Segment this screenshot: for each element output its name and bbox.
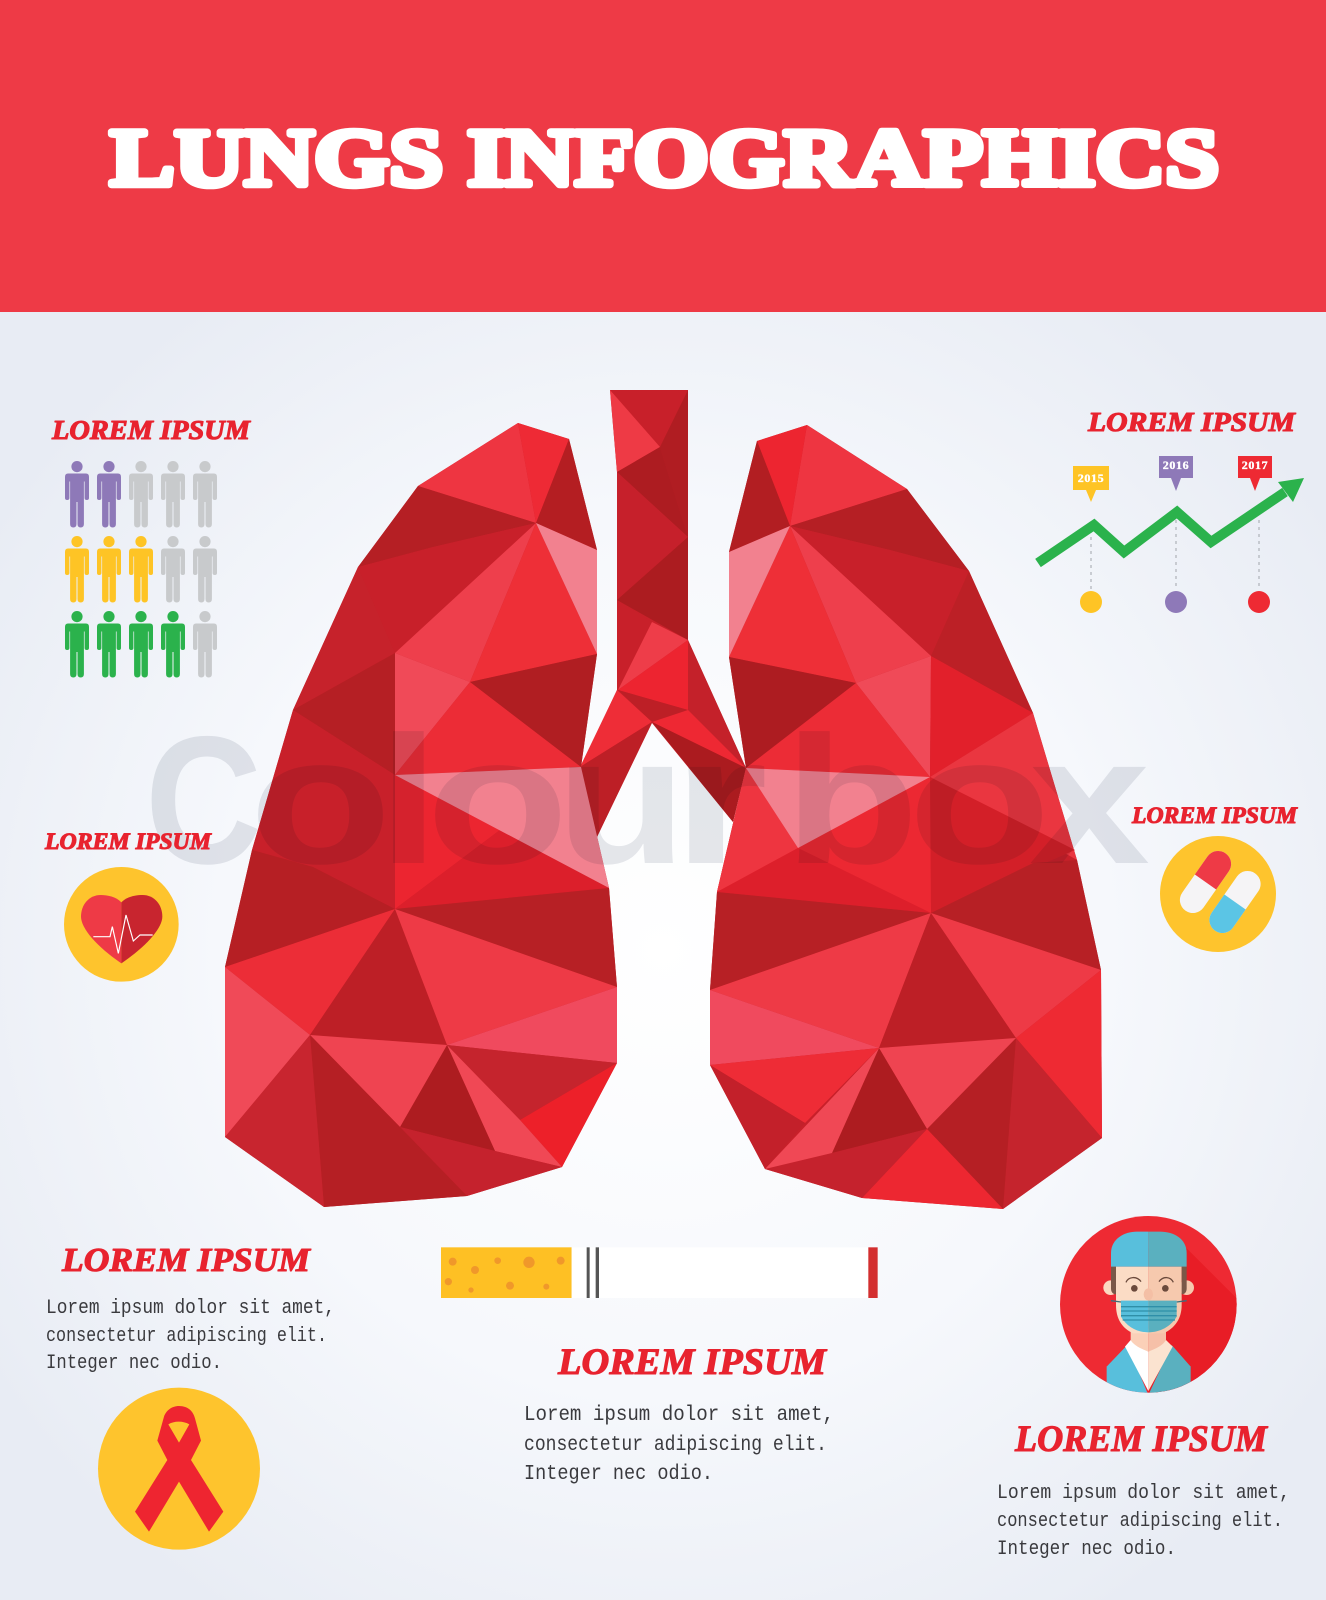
watermark: r xyxy=(672,698,768,902)
body text right: consectetur adipiscing elit. xyxy=(997,1510,1283,1533)
heading: doctor: LOREM IPSUM xyxy=(1014,1419,1268,1460)
title: LUNGS INFOGRAPHICS xyxy=(110,112,1219,203)
icon: awareness ribbon xyxy=(98,1388,260,1550)
left lung xyxy=(225,423,617,1207)
heading: people: LOREM IPSUM xyxy=(51,415,251,445)
body text right xyxy=(997,1482,1290,1561)
watermark: b xyxy=(784,698,919,902)
heading: pills: LOREM IPSUM xyxy=(1131,803,1299,828)
marker 2017 xyxy=(1238,456,1272,613)
panel: people statistic xyxy=(51,415,251,678)
panel: pills xyxy=(1131,803,1299,952)
panel: doctor text block xyxy=(997,1419,1290,1561)
green trend arrow xyxy=(1038,478,1304,563)
panel: ribbon text block xyxy=(46,1242,335,1550)
cigarette xyxy=(441,1247,878,1298)
body text right: Integer nec odio. xyxy=(997,1538,1176,1561)
marker 2015: 2015 xyxy=(1078,471,1104,485)
icon row: green people xyxy=(65,611,217,678)
body text centre xyxy=(524,1404,834,1486)
body text centre: consectetur adipiscing elit. xyxy=(524,1434,827,1457)
heading: centre: LOREM IPSUM xyxy=(557,1342,827,1383)
body text left: Lorem ipsum dolor sit amet, xyxy=(46,1297,335,1320)
watermark: u xyxy=(556,698,687,902)
body text centre: Integer nec odio. xyxy=(524,1463,713,1486)
marker 2016 xyxy=(1159,456,1193,613)
heading: chart: LOREM IPSUM xyxy=(1087,407,1296,437)
watermark: C xyxy=(145,698,262,902)
watermark: x xyxy=(1029,698,1150,902)
title banner xyxy=(0,0,1326,312)
icon: heart with pulse xyxy=(64,867,179,982)
body text left: consectetur adipiscing elit. xyxy=(46,1325,327,1348)
icon: pills xyxy=(1160,836,1276,952)
marker 2016: 2016 xyxy=(1163,458,1189,472)
body text left: Integer nec odio. xyxy=(46,1352,222,1375)
watermark: o xyxy=(249,698,392,902)
body text left xyxy=(46,1297,335,1375)
body text centre: Lorem ipsum dolor sit amet, xyxy=(524,1404,834,1427)
icon row: purple people xyxy=(65,461,217,528)
watermark: o xyxy=(426,698,569,902)
body text right: Lorem ipsum dolor sit amet, xyxy=(997,1482,1290,1505)
marker 2017: 2017 xyxy=(1242,458,1268,472)
right lung xyxy=(710,425,1102,1209)
icon row: yellow people xyxy=(65,536,217,602)
heading: heart: LOREM IPSUM xyxy=(44,829,213,854)
watermark: o xyxy=(908,698,1051,902)
panel: centre text block xyxy=(524,1342,834,1486)
trachea and bronchi xyxy=(580,390,746,837)
panel: trend chart xyxy=(1038,407,1304,613)
icon: doctor with mask xyxy=(1060,1216,1240,1395)
panel: heart xyxy=(44,829,213,982)
watermark: l xyxy=(378,698,440,902)
marker 2015 xyxy=(1073,466,1109,613)
heading: ribbon: LOREM IPSUM xyxy=(61,1242,312,1279)
